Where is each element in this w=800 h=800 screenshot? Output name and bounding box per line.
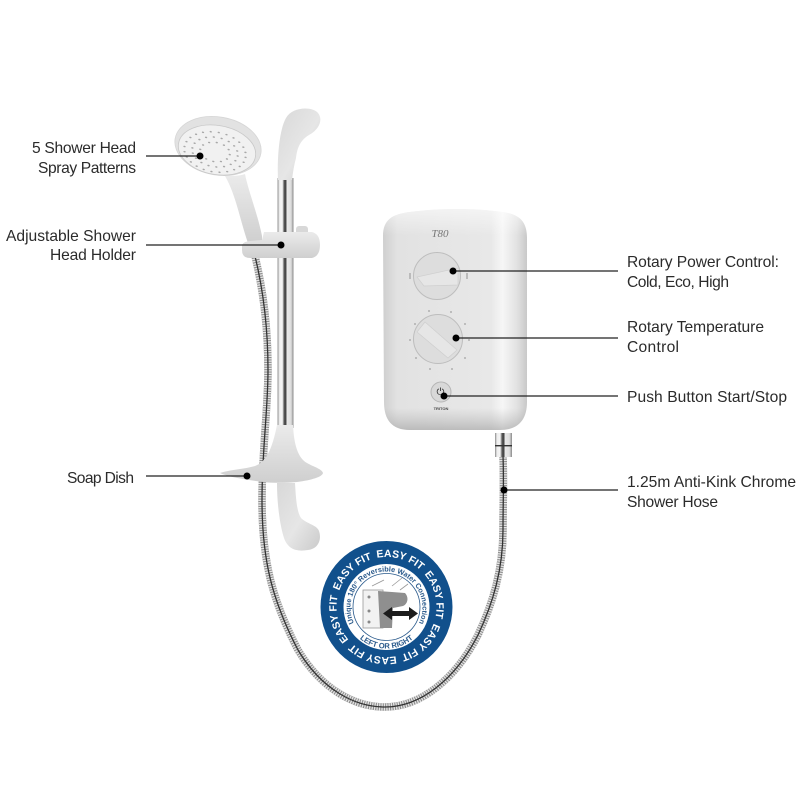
label: 5 shower head spray patterns: 5 Shower Head	[32, 140, 136, 157]
brand mark: T80	[431, 228, 449, 240]
label: 5 shower head spray patterns: Spray Patterns	[38, 160, 136, 177]
inner arc text: LEFT OR RIGHT	[360, 634, 412, 648]
label: shower hose: 1.25m Anti-Kink Chrome	[627, 474, 796, 491]
shower unit panel	[383, 209, 527, 430]
shower head holder	[242, 226, 320, 258]
water inlet connector	[495, 433, 512, 457]
label: adjustable shower head holder: Adjustable Shower	[6, 228, 136, 245]
chrome shower hose	[255, 256, 503, 707]
shower head	[170, 110, 266, 182]
ring text: EASY FIT	[424, 570, 444, 620]
inner arc text	[346, 566, 428, 648]
label: shower hose	[627, 474, 796, 511]
shower head handle	[225, 174, 262, 243]
leader: push button	[440, 392, 618, 400]
connection diagram	[363, 578, 418, 628]
label: shower hose: Shower Hose	[627, 494, 718, 511]
leader: soap dish	[146, 472, 250, 480]
label: 5 shower head spray patterns	[32, 140, 136, 177]
label: push button: Push Button Start/Stop	[627, 389, 787, 406]
ring text: EASY FIT	[348, 645, 396, 664]
label: rotary temperature control: Rotary Temperature	[627, 319, 764, 336]
start/stop button	[431, 382, 451, 411]
spray holes	[181, 127, 249, 177]
start/stop button: TRITON	[434, 406, 449, 411]
leader: head holder	[146, 242, 284, 248]
label: soap dish: Soap Dish	[67, 470, 134, 487]
leader: power control	[450, 268, 618, 274]
leader: shower hose	[500, 486, 618, 494]
chrome slide rail	[278, 178, 294, 428]
label: rotary power control: Cold, Eco, High	[627, 274, 729, 291]
leader: temperature control	[452, 334, 618, 342]
rotary temperature knob	[409, 310, 470, 370]
inner arc text: Unique 180° Reversible Water Connection	[346, 566, 428, 625]
label: rotary power control: Rotary Power Control:	[627, 254, 779, 271]
start/stop button: ⏻	[437, 387, 445, 398]
label: adjustable shower head holder: Head Holder	[50, 247, 136, 264]
soap dish	[220, 425, 323, 551]
ring text: EASY FIT	[376, 550, 426, 569]
label: adjustable shower head holder	[6, 228, 136, 264]
ring text: EASY FIT	[329, 594, 348, 644]
leader: spray patterns	[146, 152, 204, 160]
label: rotary temperature control: Control	[627, 339, 679, 356]
easy fit badge	[320, 541, 452, 673]
ring text: EASY FIT	[403, 624, 440, 662]
rotary power knob	[409, 252, 468, 300]
label: rotary temperature control	[627, 319, 764, 356]
ring text	[329, 550, 444, 664]
rail top end cap	[278, 109, 320, 180]
label: rotary power control	[627, 254, 779, 291]
ring text: EASY FIT	[332, 552, 370, 590]
